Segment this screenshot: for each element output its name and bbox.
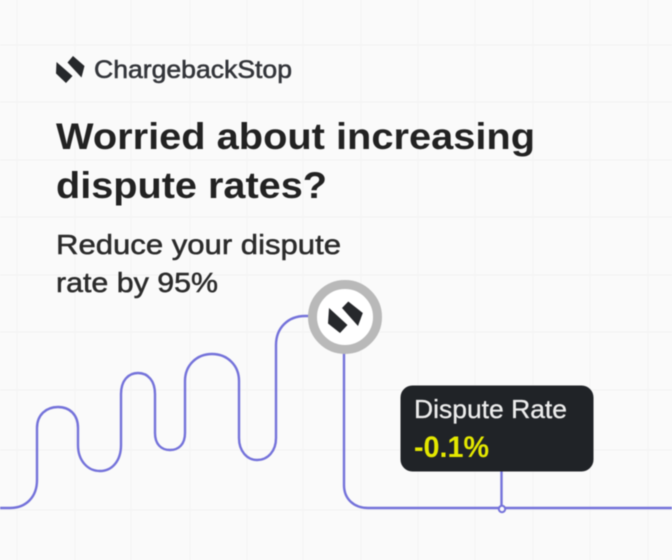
callout: dispute rate (400, 386, 594, 472)
callout value: -0.1% (414, 431, 489, 464)
heading (56, 116, 535, 206)
heading: Worried about increasing (56, 116, 535, 157)
brand name: ChargebackStop (94, 56, 292, 84)
line chart: dispute rate trend (0, 316, 672, 508)
connector from callout to line (499, 470, 505, 512)
subheading: Reduce your dispute (56, 229, 341, 260)
logo: ChargebackStop (56, 56, 292, 84)
subheading (56, 229, 341, 298)
heading: dispute rates? (56, 165, 327, 206)
marker: logo circle on line (312, 284, 378, 350)
callout label: Dispute Rate (414, 394, 567, 424)
icon: logo mark in marker (328, 302, 363, 333)
subheading: rate by 95% (56, 267, 218, 298)
icon: logo mark (56, 56, 84, 83)
